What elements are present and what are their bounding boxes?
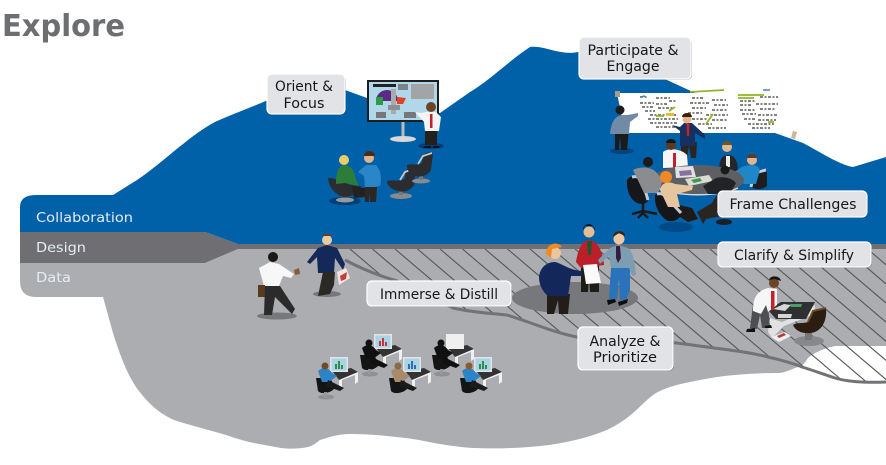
illustration: whiteboard with scribes — [610, 90, 797, 158]
right chair — [750, 169, 767, 189]
callout: Clarify & Simplify: Clarify & Simplify — [734, 248, 854, 264]
panel: design layer — [20, 232, 886, 263]
callout: Participate & Engage — [579, 37, 692, 80]
callout: Frame Challenges: Frame Challenges — [730, 197, 856, 213]
callout: Frame Challenges — [718, 191, 868, 218]
callout: Participate & Engage: Participate & — [588, 43, 679, 59]
workstation 4 — [432, 334, 474, 376]
person standing — [672, 113, 705, 158]
illustration: analyst trio — [512, 224, 638, 314]
left person and chair — [632, 203, 657, 218]
callout: Analyze & Prioritize: Analyze & — [590, 334, 661, 350]
illustration: data workstations — [316, 334, 502, 400]
title: Explore — [2, 9, 125, 44]
dividing curve — [345, 260, 886, 382]
dark person right — [697, 190, 735, 224]
chair front — [387, 168, 416, 199]
workstation 5 — [460, 357, 502, 393]
callout: Clarify & Simplify — [718, 242, 872, 268]
callout: Orient & Focus — [267, 74, 346, 115]
paper on floor — [771, 332, 791, 342]
callout: Analyze & Prioritize: Prioritize — [593, 350, 657, 366]
illustration: two people greeting — [257, 234, 350, 320]
workstation 2 — [360, 334, 402, 376]
illustration: person reviewing at desk — [746, 276, 826, 346]
workstation 3 — [389, 357, 431, 393]
callout: Orient & Focus: Focus — [284, 96, 324, 112]
panel: band labels — [36, 210, 133, 286]
illustration: presentation screen and presenter — [367, 80, 444, 149]
callout: Immerse & Distill — [367, 281, 512, 307]
front person and chair — [675, 204, 698, 222]
whiteboard and stripes — [345, 249, 886, 394]
workstation 1 — [316, 357, 358, 400]
callout: Participate & Engage: Engage — [606, 59, 660, 75]
label: Data: Data — [36, 270, 71, 286]
label: Design: Design — [36, 240, 86, 256]
table — [652, 165, 744, 195]
illustration: meeting table group — [627, 139, 767, 232]
callout: Orient & Focus: Orient & — [275, 79, 333, 95]
callout: Analyze & Prioritize — [578, 327, 674, 371]
striped data region — [350, 249, 886, 394]
chair rear — [407, 152, 433, 184]
panel: data layer — [20, 249, 886, 449]
illustration: seated conversation — [328, 151, 433, 205]
callout: Immerse & Distill: Immerse & Distill — [380, 287, 498, 303]
person writing — [610, 106, 638, 154]
panel: collaboration layer — [20, 47, 886, 244]
label: Collaboration: Collaboration — [36, 210, 133, 226]
